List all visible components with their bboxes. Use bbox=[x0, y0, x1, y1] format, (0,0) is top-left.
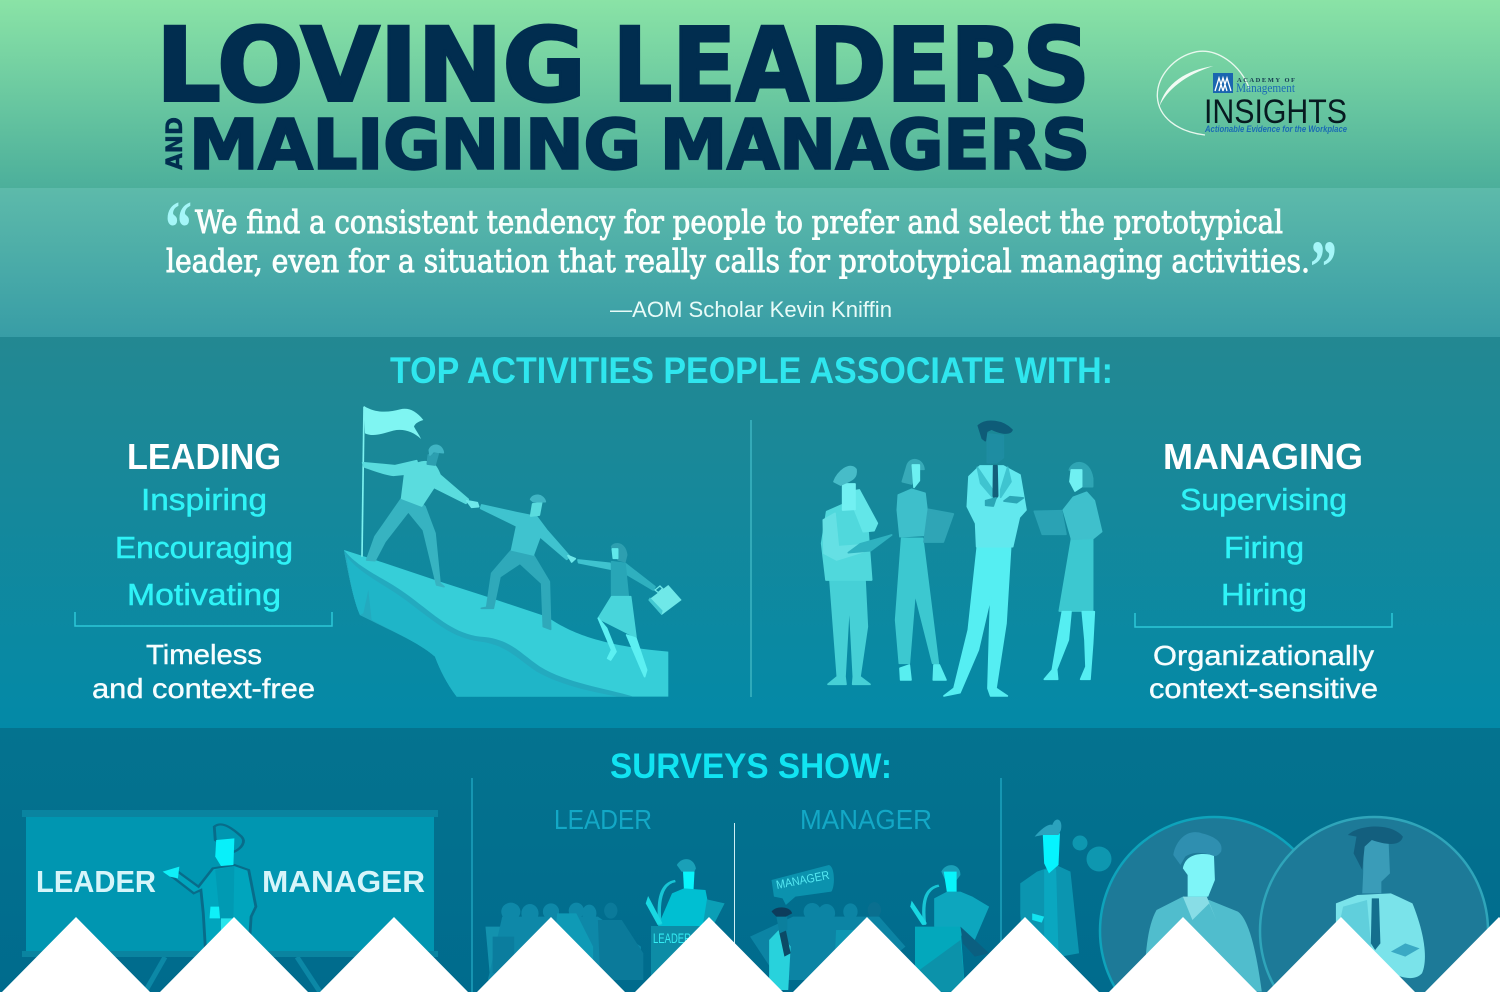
illustration: presentation board bbox=[22, 810, 438, 992]
divider middle bbox=[734, 823, 736, 992]
title word: managers: MANAGERS bbox=[660, 106, 1090, 186]
managing heading: MANAGING bbox=[1163, 436, 1363, 477]
flag bbox=[362, 406, 423, 557]
opening quote mark: “ bbox=[165, 186, 192, 270]
center divider bbox=[750, 420, 752, 697]
label: manager: MANAGER bbox=[800, 804, 932, 835]
manager audience member bbox=[769, 907, 792, 990]
board label manager: MANAGER bbox=[262, 864, 425, 899]
leader speaker bbox=[646, 859, 725, 927]
title word: leaders: LEADERS bbox=[612, 6, 1090, 126]
panel: leading list bbox=[75, 436, 332, 704]
manager 4 bbox=[1034, 463, 1102, 679]
label: leader: LEADER bbox=[554, 804, 652, 835]
illustration: manager speaking to audience bbox=[750, 865, 989, 992]
panel: header background bbox=[0, 0, 1500, 188]
leader podium label: LEADER bbox=[653, 930, 691, 946]
manager 3 bbox=[944, 421, 1026, 696]
thinker figure bbox=[1020, 820, 1079, 990]
managing activity 3: Hiring bbox=[1221, 577, 1307, 612]
manager 2 bbox=[896, 460, 953, 680]
logo: AOM Insights bbox=[1157, 51, 1347, 135]
board top bar bbox=[22, 810, 438, 817]
board bottom bar bbox=[22, 951, 438, 957]
managing activity 2: Firing bbox=[1224, 530, 1304, 565]
leading bracket bbox=[75, 612, 332, 626]
divider right bbox=[1000, 778, 1002, 992]
heading: surveys show: SURVEYS SHOW: bbox=[610, 747, 892, 786]
thought bubble large bbox=[1086, 846, 1112, 872]
divider left bbox=[471, 778, 473, 992]
logo academy text: ACADEMY OF bbox=[1237, 77, 1295, 84]
manager audience bbox=[750, 902, 905, 980]
quote attribution: —AOM Scholar Kevin Kniffin bbox=[610, 297, 892, 322]
managing bracket bbox=[1135, 613, 1392, 627]
manager speaker bbox=[910, 865, 989, 940]
presenter at board bbox=[163, 824, 256, 953]
managing activity 1: Supervising bbox=[1180, 482, 1347, 517]
quote line 1: We find a consistent tendency for people to prefer and select the prototypical bbox=[195, 203, 1283, 241]
speech bubble bbox=[772, 865, 834, 905]
title word: maligning: MALIGNING bbox=[189, 106, 641, 186]
managing summary line 2: context-sensitive bbox=[1149, 673, 1378, 704]
logo swoosh bbox=[1157, 51, 1250, 135]
logo insights text: INSIGHTS bbox=[1204, 93, 1347, 131]
manager 1 bbox=[822, 467, 892, 684]
closing quote mark: ” bbox=[1310, 226, 1337, 310]
logo tagline: Actionable Evidence for the Workplace bbox=[1204, 124, 1347, 134]
manager podium bbox=[915, 927, 989, 992]
leading summary line 1: Timeless bbox=[146, 639, 262, 670]
circle right with manager bbox=[1260, 817, 1488, 1000]
board surface bbox=[26, 817, 434, 953]
heading: top activities: TOP ACTIVITIES PEOPLE ASSOCIATE WITH: bbox=[390, 350, 1113, 391]
climber 1 bbox=[363, 445, 479, 587]
leading activity 1: Inspiring bbox=[141, 482, 267, 517]
cliff bbox=[344, 550, 668, 697]
quote line 2: leader, even for a situation that really calls for prototypical managing activities. bbox=[166, 242, 1310, 280]
panel: activities background bbox=[0, 337, 1500, 728]
board label leader: LEADER bbox=[36, 864, 156, 899]
illustration: thinking person bbox=[1020, 820, 1112, 990]
circle left with leader bbox=[1100, 817, 1328, 1000]
panel: quote background bbox=[0, 188, 1500, 337]
board legs bbox=[145, 957, 320, 992]
title bbox=[156, 6, 1090, 186]
thought bubble small bbox=[1072, 836, 1088, 850]
climber 2 bbox=[481, 495, 575, 629]
logo management text: Management bbox=[1236, 80, 1295, 95]
leading activity 2: Encouraging bbox=[115, 530, 293, 565]
leading summary line 2: and context-free bbox=[92, 673, 315, 704]
leader audience bbox=[485, 903, 643, 980]
title word: and: AND bbox=[163, 117, 188, 170]
briefcase bbox=[648, 585, 682, 615]
panel: surveys background bbox=[0, 728, 1500, 992]
climber 3 bbox=[578, 544, 655, 677]
leading activity 3: Motivating bbox=[127, 577, 281, 612]
illustration: leaders climbing a cliff bbox=[344, 406, 682, 697]
title word: loving: LOVING bbox=[156, 6, 586, 126]
speech bubble text: MANAGER bbox=[775, 868, 831, 892]
quote bbox=[165, 186, 1337, 322]
panel: managing list bbox=[1135, 436, 1392, 704]
illustration: managers group bbox=[822, 421, 1102, 696]
illustration: leader speaking to audience bbox=[485, 859, 725, 992]
leader podium bbox=[651, 926, 710, 992]
leading heading: LEADING bbox=[127, 436, 281, 477]
illustration: comparison circles bbox=[1100, 817, 1488, 1000]
managing summary line 1: Organizationally bbox=[1153, 640, 1374, 671]
logo mark bbox=[1213, 73, 1233, 93]
white zigzag torn edge bbox=[0, 917, 1500, 1000]
